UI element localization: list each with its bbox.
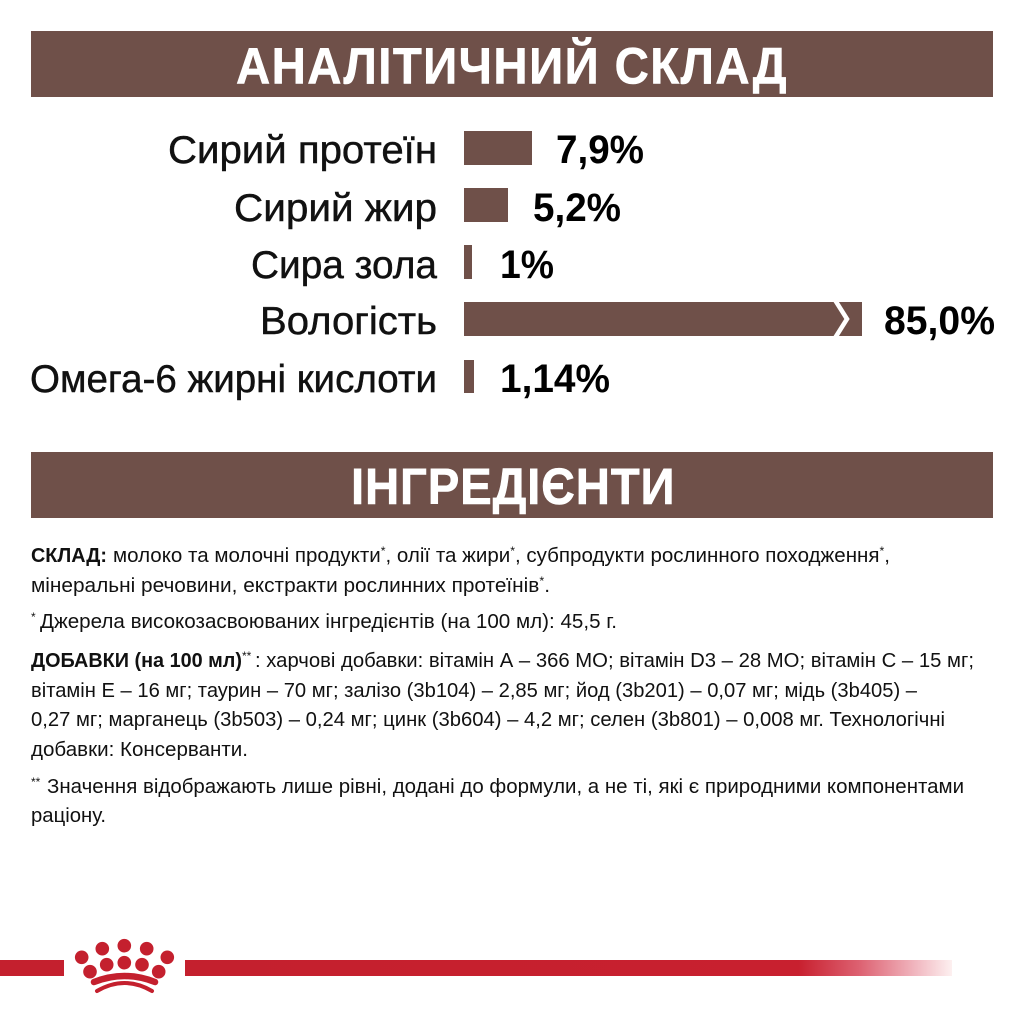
additives paragraph: вітамін Е – 16 мг; таурин – 70 мг; залізо (3b104) – 2,85 мг; йод (3b201) – 0,07 мг; мідь (3b405) – [31, 680, 918, 702]
additives paragraph: : харчові добавки: вітамін А – 366 МО; вітамін D3 – 28 МО; вітамін С – 15 мг; [255, 650, 974, 672]
icon: bar break chevron [835, 300, 847, 338]
composition paragraph: * [879, 544, 885, 558]
composition paragraph [31, 544, 890, 597]
icon: crown logo [75, 939, 174, 991]
row: crude ash [251, 243, 554, 287]
additives paragraph: 0,27 мг; марганець (3b503) – 0,24 мг; цинк (3b604) – 4,2 мг; селен (3b801) – 0,008 мг. Технологічні [31, 709, 945, 731]
row: crude ash: 1% [500, 243, 554, 287]
row: omega-6 fatty acids: 1,14% [500, 357, 610, 401]
header: analytical composition: АНАЛІТИЧНИЙ СКЛАД [236, 36, 787, 95]
additives paragraph: ДОБАВКИ (на 100 мл) [31, 650, 242, 672]
composition paragraph: СКЛАД: [31, 545, 107, 567]
header: ingredients [31, 452, 993, 518]
footnote: added levels: Значення відображають лише рівні, додані до формули, а не ті, які є природними компонентами [47, 776, 964, 798]
composition paragraph: * [510, 544, 515, 558]
row: crude protein: Сирий протеїн [168, 129, 437, 172]
row: crude protein: 7,9% [556, 128, 644, 172]
bar chart: analytical composition [30, 128, 995, 401]
composition paragraph: , олії та жири [386, 545, 510, 567]
row: moisture [260, 299, 995, 343]
composition paragraph: * [381, 544, 386, 558]
row: omega-6 fatty acids [30, 357, 610, 401]
composition paragraph: мінеральні речовини, екстракти рослинних протеїнів [31, 575, 520, 597]
footnote: added levels [31, 775, 964, 827]
composition paragraph: молоко та молочні продукти [113, 545, 374, 567]
composition paragraph: . [544, 575, 550, 597]
footnote: added levels: раціону. [31, 805, 106, 827]
composition paragraph: , [884, 545, 890, 567]
header: analytical composition [31, 31, 993, 97]
footnote: digestible ingredients: Джерела високозасвоюваних інгредієнтів (на 100 мл): 45,5 г. [40, 611, 617, 633]
row: moisture: Вологість [260, 300, 437, 343]
additives paragraph: ** [242, 649, 252, 663]
row: moisture: 85,0% [884, 299, 995, 343]
row: omega-6 fatty acids: Омега-6 жирні кислоти [30, 358, 437, 401]
row: crude fat: 5,2% [533, 186, 621, 230]
footer band: red stripe [0, 960, 952, 976]
footnote: added levels: ** [31, 775, 41, 789]
composition paragraph: , субпродукти рослинного походження [515, 545, 879, 567]
footnote: digestible ingredients: * [31, 610, 36, 624]
row: crude fat [234, 186, 621, 230]
row: crude fat: Сирий жир [234, 187, 437, 230]
additives paragraph [31, 649, 974, 761]
text block: ingredients [31, 544, 974, 827]
row: crude protein [168, 128, 644, 172]
header: ingredients: ІНГРЕДІЄНТИ [351, 458, 675, 515]
row: crude ash: Сира зола [251, 244, 438, 287]
composition paragraph: * [539, 574, 545, 588]
additives paragraph: добавки: Консерванти. [31, 739, 248, 761]
